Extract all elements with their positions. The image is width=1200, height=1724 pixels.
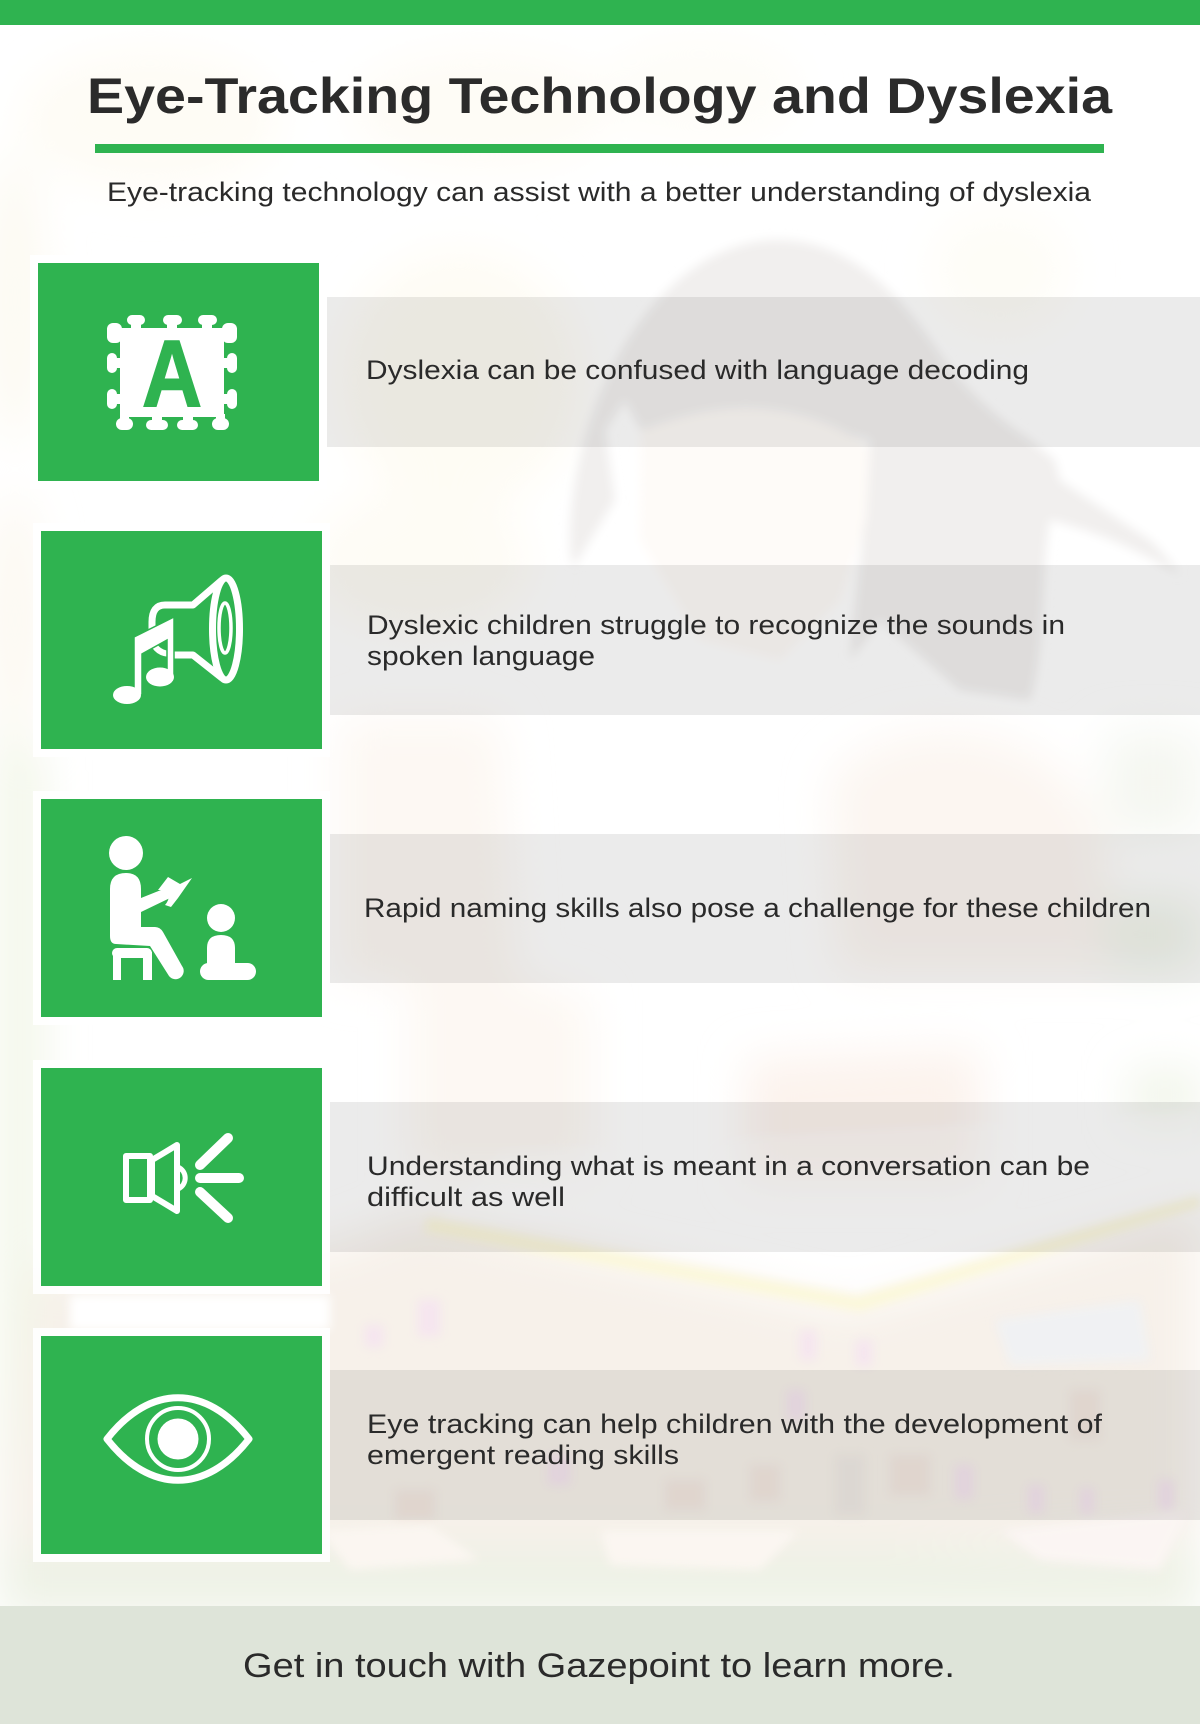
text band 4 bbox=[330, 1102, 1200, 1252]
footer band bbox=[0, 1606, 1200, 1724]
text 2: spoken language bbox=[367, 641, 595, 671]
hair and face bbox=[570, 240, 1180, 700]
text band 1 bbox=[327, 297, 1200, 447]
icon panel 5 bbox=[33, 1328, 330, 1562]
icon: megaphone with music notes bbox=[113, 578, 240, 704]
text 5: emergent reading skills bbox=[367, 1440, 679, 1470]
icon panel 4 bbox=[33, 1060, 330, 1294]
text band 5 bbox=[330, 1370, 1200, 1520]
row 1: language decoding bbox=[30, 255, 1200, 489]
text 4 bbox=[367, 1151, 1090, 1212]
book bbox=[70, 1110, 1200, 1570]
row 3: rapid naming bbox=[33, 791, 1200, 1025]
subtitle: Eye-tracking technology can assist with a better understanding of dyslexia bbox=[107, 177, 1092, 207]
text 2: Dyslexic children struggle to recognize the sounds in bbox=[367, 610, 1065, 640]
text 3: Rapid naming skills also pose a challenge for these children bbox=[364, 893, 1151, 923]
icon: puzzle tile with letter A bbox=[107, 315, 237, 430]
text band 3 bbox=[330, 834, 1200, 983]
icon: puzzle tile with letter A: A bbox=[142, 321, 202, 427]
text 2 bbox=[367, 610, 1065, 671]
title underline bbox=[95, 144, 1104, 153]
icon panel 1 bbox=[30, 255, 327, 489]
text 5 bbox=[367, 1409, 1103, 1470]
icon: adult reading to child bbox=[109, 836, 256, 980]
top green bar bbox=[0, 0, 1200, 25]
row 2: sounds in spoken language bbox=[33, 523, 1200, 757]
icon: eye bbox=[107, 1398, 249, 1480]
text 4: difficult as well bbox=[367, 1182, 565, 1212]
footer call to action: Get in touch with Gazepoint to learn more. bbox=[243, 1647, 955, 1685]
text 5: Eye tracking can help children with the development of bbox=[367, 1409, 1103, 1439]
text band 2 bbox=[330, 565, 1200, 715]
row 5: eye tracking bbox=[33, 1328, 1200, 1562]
row 4: conversation bbox=[33, 1060, 1200, 1294]
text 1: Dyslexia can be confused with language decoding bbox=[366, 355, 1029, 385]
title: Eye-Tracking Technology and Dyslexia bbox=[87, 68, 1113, 124]
icon panel 2 bbox=[33, 523, 330, 757]
icon panel 3 bbox=[33, 791, 330, 1025]
text 4: Understanding what is meant in a conversation can be bbox=[367, 1151, 1090, 1181]
icon: speaker with sound rays bbox=[126, 1138, 239, 1218]
